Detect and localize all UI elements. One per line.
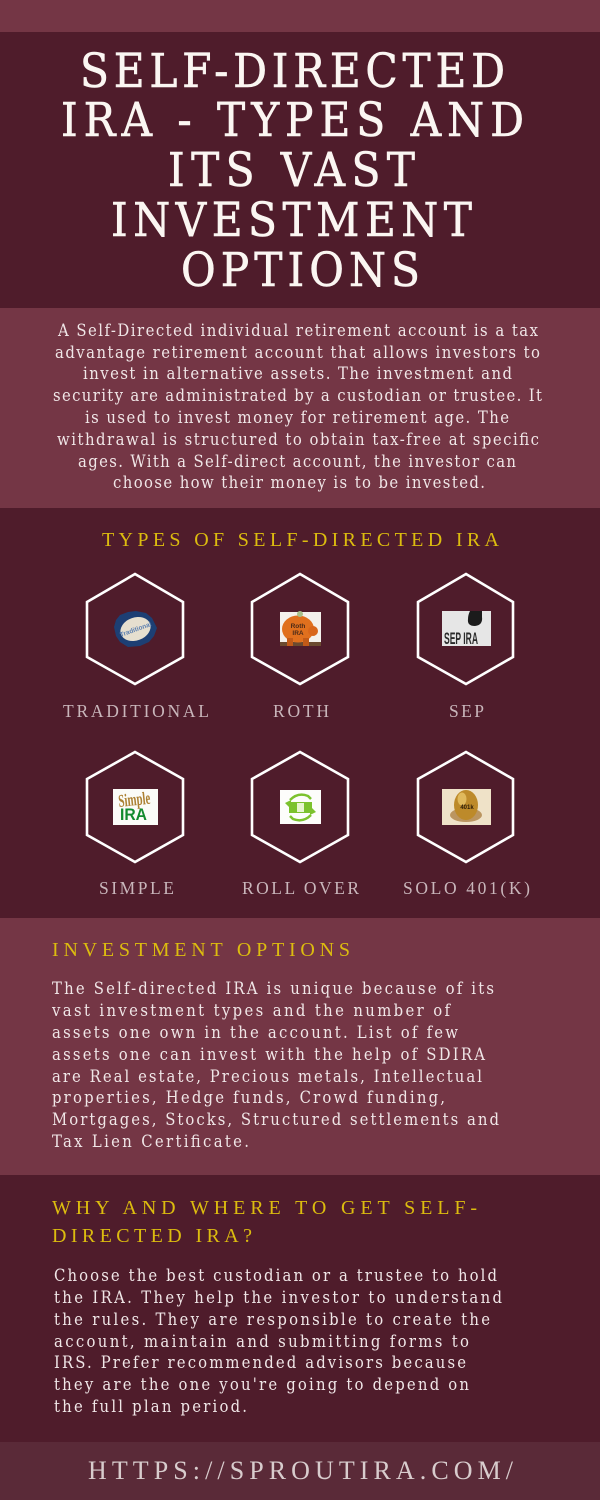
why and where text: the rules. They are responsible to create the bbox=[54, 1310, 490, 1329]
title: OPTIONS bbox=[181, 243, 420, 298]
heading: why and where: WHY AND WHERE TO GET SELF- bbox=[52, 1197, 477, 1219]
icon: roth piggy bank: IRA bbox=[292, 630, 304, 637]
investment options text: Mortgages, Stocks, Structured settlements and bbox=[52, 1110, 500, 1129]
investment options text: assets one own in the account. List of few bbox=[52, 1023, 458, 1042]
panel: introduction bbox=[0, 308, 600, 508]
icon: golden egg: 401k bbox=[460, 805, 474, 811]
icon: traditional stone: Traditional bbox=[119, 621, 153, 639]
panel: introduction: ages. With a Self-direct account, the investor can bbox=[78, 452, 516, 471]
why and where text: Choose the best custodian or a trustee to hold bbox=[54, 1266, 498, 1285]
icon: sep ira note bbox=[442, 611, 491, 648]
type: roth bbox=[252, 574, 348, 721]
type: roth: ROTH bbox=[273, 701, 329, 721]
why and where text: the IRA. They help the investor to understand bbox=[54, 1288, 503, 1307]
title bbox=[61, 44, 524, 298]
panel: introduction: A Self-Directed individual retirement account is a tax bbox=[57, 321, 539, 340]
title: IRA - TYPES AND bbox=[61, 93, 524, 148]
heading: why and where bbox=[52, 1197, 477, 1247]
panel: investment options bbox=[0, 918, 600, 1175]
panel: introduction: withdrawal is structured to obtain tax-free at specific bbox=[57, 430, 539, 449]
type: roll over bbox=[242, 752, 359, 898]
title: SELF-DIRECTED bbox=[80, 44, 505, 99]
panel: introduction: choose how their money is to be invested. bbox=[113, 473, 485, 492]
icon: simple ira logo: IRA bbox=[120, 805, 147, 824]
why and where text: IRS. Prefer recommended advisors because bbox=[54, 1353, 466, 1372]
type: roll over: ROLL OVER bbox=[242, 878, 359, 898]
panel: introduction: invest in alternative assets. The investment and bbox=[83, 364, 513, 383]
type: traditional bbox=[63, 574, 209, 721]
icon: roth piggy bank: Roth bbox=[291, 623, 305, 630]
type: solo 401k bbox=[403, 752, 530, 898]
footer band with url: HTTPS://SPROUTIRA.COM/ bbox=[88, 1456, 514, 1485]
investment options text: are Real estate, Precious metals, Intellectual bbox=[52, 1067, 482, 1086]
investment options text: Tax Lien Certificate. bbox=[52, 1132, 249, 1151]
icon: simple ira logo: Simple bbox=[117, 788, 151, 811]
investment options text: assets one can invest with the help of SDIRA bbox=[52, 1045, 485, 1064]
type: simple: SIMPLE bbox=[99, 878, 174, 898]
heading: why and where: DIRECTED IRA? bbox=[52, 1225, 252, 1247]
investment options text bbox=[51, 979, 500, 1151]
type: traditional: TRADITIONAL bbox=[63, 701, 209, 721]
investment options text: properties, Hedge funds, Crowd funding, bbox=[52, 1088, 445, 1107]
why and where text: the full plan period. bbox=[54, 1397, 247, 1416]
why and where text: they are the one you're going to depend on bbox=[54, 1375, 469, 1394]
icon: rollover arrows bbox=[280, 790, 321, 824]
icon: roth piggy bank bbox=[280, 611, 321, 646]
type: sep: SEP bbox=[449, 701, 484, 721]
heading: investment options: INVESTMENT OPTIONS bbox=[52, 939, 350, 961]
investment options text: The Self-directed IRA is unique because of its bbox=[52, 979, 494, 998]
type: solo 401k: SOLO 401(K) bbox=[403, 878, 530, 898]
top band bbox=[0, 0, 600, 32]
why and where text: account, maintain and submitting forms to bbox=[54, 1332, 469, 1351]
icon: traditional stone bbox=[114, 611, 157, 647]
title: ITS VAST bbox=[168, 143, 415, 198]
icon: simple ira logo bbox=[113, 788, 158, 825]
investment options text: vast investment types and the number of bbox=[51, 1001, 452, 1020]
heading: types: TYPES OF SELF-DIRECTED IRA bbox=[102, 529, 500, 551]
panel: introduction: security are administrated by a custodian or trustee. It bbox=[53, 386, 542, 405]
panel: introduction: is used to invest money for retirement age. The bbox=[85, 408, 509, 427]
type: simple bbox=[87, 752, 183, 898]
why and where text bbox=[54, 1266, 503, 1416]
title: INVESTMENT bbox=[111, 193, 472, 248]
icon: golden egg bbox=[442, 789, 491, 825]
panel: introduction: advantage retirement account that allows investors to bbox=[55, 343, 540, 362]
footer band with url bbox=[0, 1442, 600, 1500]
icon: sep ira note: SEP IRA bbox=[444, 629, 478, 648]
type: sep bbox=[418, 574, 513, 721]
